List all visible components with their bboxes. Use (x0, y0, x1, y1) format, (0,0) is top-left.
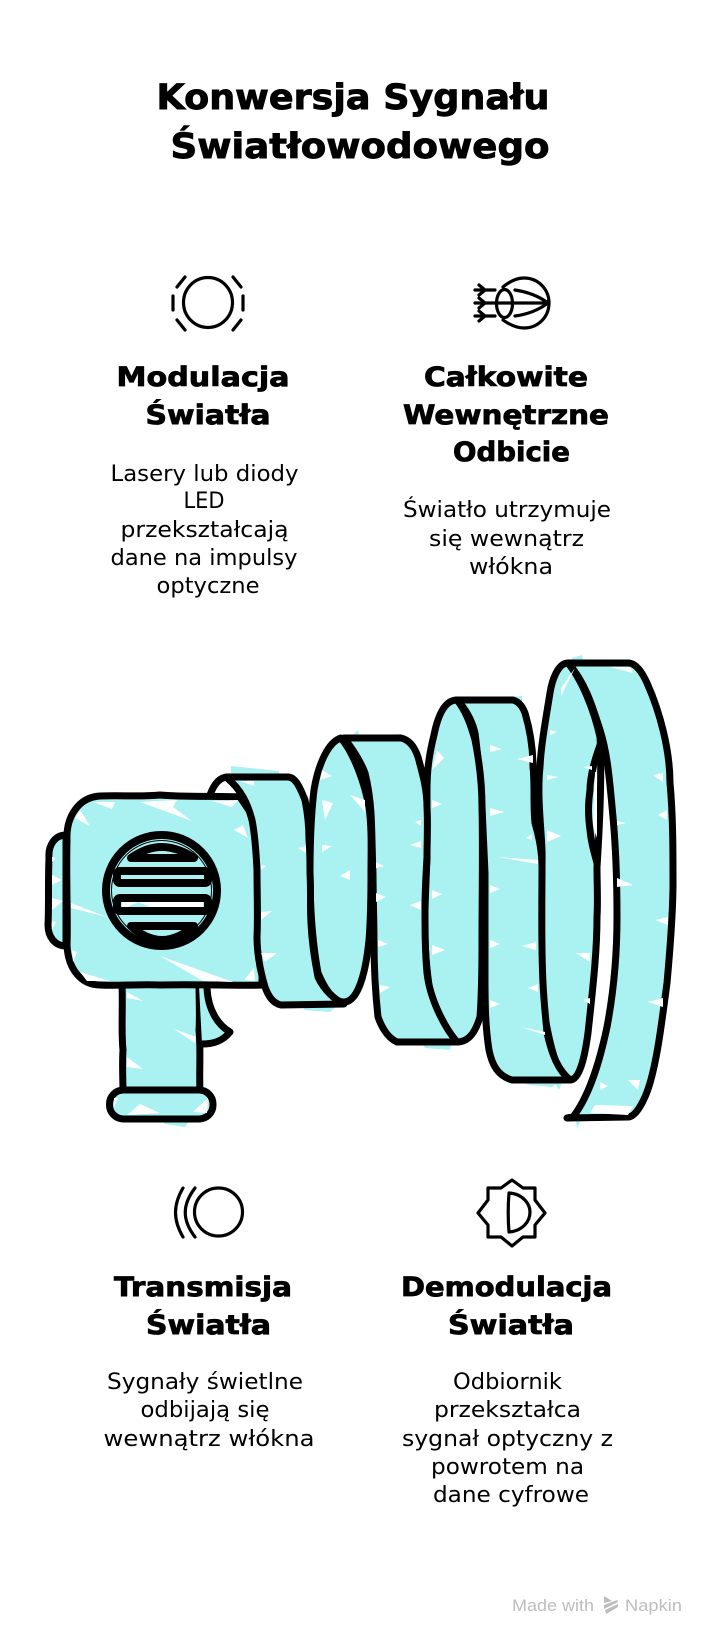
text: Modulacja description: przekształcają (120, 518, 288, 543)
text: Całkowite description: się wewnątrz (429, 527, 584, 552)
footer: Made with Napkin: Napkin (625, 1596, 682, 1615)
heading: Całkowite Wewnętrzne Odbicie: Odbicie (453, 437, 570, 468)
panel: Całkowite Wewnętrzne Odbicie (403, 278, 611, 580)
colour spill behind outlines (160, 655, 584, 1128)
text: Całkowite description: włókna (469, 555, 553, 580)
text: Demodulacja description: Odbiornik (453, 1370, 562, 1395)
heading: Modulacja Światła (116, 362, 290, 431)
text: Całkowite description (403, 497, 611, 580)
text: Modulacja description: dane na impulsy (110, 546, 298, 571)
panel: Demodulacja Światła (401, 1180, 613, 1508)
handle (122, 984, 200, 1092)
heading: Transmisja Światła: Światła (146, 1309, 271, 1341)
text: Demodulacja description: dane cyfrowe (433, 1483, 589, 1508)
heading: Transmisja Światła (114, 1272, 292, 1341)
icon: circle with signal arcs (176, 1188, 242, 1237)
ribbon turn 3 (457, 700, 570, 1080)
heading: Całkowite Wewnętrzne Odbicie (403, 362, 609, 468)
text: Demodulacja description: sygnał optyczny z (402, 1427, 613, 1452)
text: Modulacja description (110, 462, 298, 599)
icon: circle with dashes (173, 277, 243, 330)
text: Modulacja description: LED (184, 489, 224, 514)
speaker grill (106, 835, 217, 946)
text: Demodulacja description: powrotem na (431, 1455, 584, 1480)
ribbon turn 1 (226, 777, 344, 1005)
ribbon turn 2 inner face (310, 738, 371, 1002)
heading: Modulacja Światła: Modulacja (116, 362, 290, 393)
text: Modulacja description: Lasery lub diody (110, 462, 298, 487)
white highlight streaks (52, 667, 668, 1115)
foot (110, 1090, 213, 1119)
icon: badge with letter D (478, 1180, 545, 1246)
panel: Modulacja Światła (110, 277, 298, 599)
text: Transmisja description: wewnątrz włókna (104, 1427, 314, 1452)
text: Całkowite description: Światło utrzymuje (403, 497, 611, 523)
panel: Transmisja Światła (104, 1188, 314, 1452)
heading: Demodulacja Światła (401, 1272, 612, 1341)
icon: rays entering fibre (475, 278, 549, 328)
ribbon turn 4 inner face (538, 663, 601, 1080)
text: Transmisja description (104, 1370, 314, 1452)
title (156, 78, 550, 167)
back knob (48, 835, 66, 946)
heading: Modulacja Światła: Światła (146, 399, 270, 431)
text: Demodulacja description (402, 1370, 613, 1508)
heading: Demodulacja Światła: Światła (448, 1309, 574, 1341)
text: Transmisja description: odbijają się (140, 1398, 270, 1423)
megaphone body (67, 795, 262, 985)
ribbon turn 4 (567, 663, 673, 1118)
title: Światłowodowego (170, 125, 550, 167)
inner back edge (588, 740, 602, 863)
ribbon turn 1 back sliver (210, 777, 250, 800)
title: Konwersja Sygnału (156, 78, 550, 118)
text: Transmisja description: Sygnały świetlne (107, 1370, 303, 1395)
trigger (199, 986, 230, 1044)
illustration: megaphone with spiral light ribbon (48, 655, 673, 1128)
heading: Demodulacja Światła: Demodulacja (401, 1272, 612, 1303)
text: Modulacja description: optyczne (156, 574, 260, 599)
heading: Transmisja Światła: Transmisja (114, 1272, 292, 1303)
ribbon turn 2 (344, 738, 457, 1042)
heading: Całkowite Wewnętrzne Odbicie: Całkowite (424, 362, 588, 393)
text: Demodulacja description: przekształca (434, 1398, 581, 1423)
footer: Made with Napkin: Made with (512, 1596, 594, 1615)
heading: Całkowite Wewnętrzne Odbicie: Wewnętrzne (403, 400, 609, 431)
ribbon turn 3 inner face (425, 700, 482, 1042)
footer: Made with Napkin (512, 1596, 682, 1615)
